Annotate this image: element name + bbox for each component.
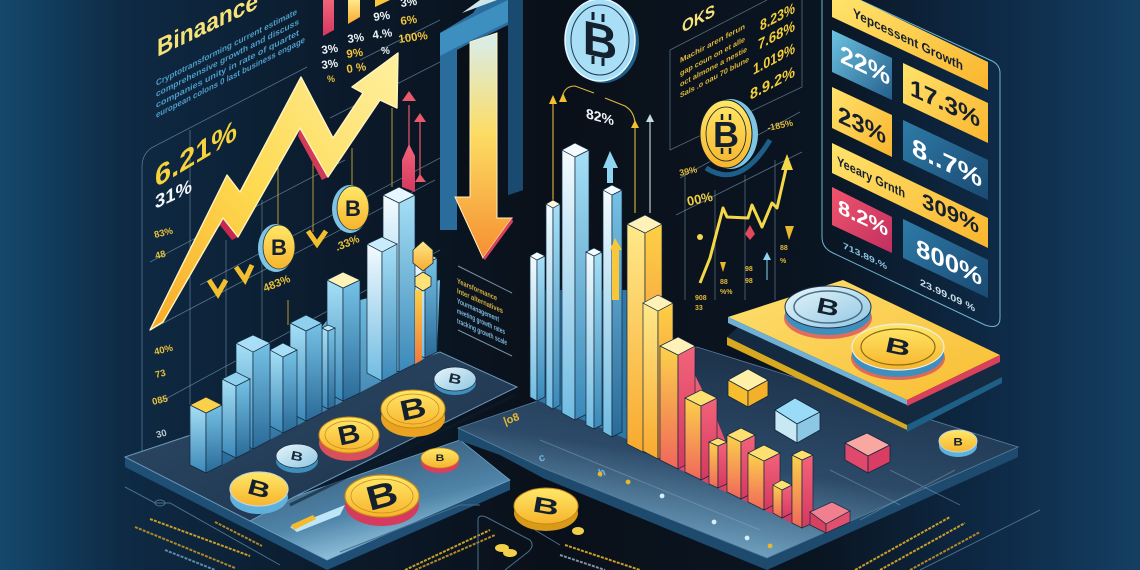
text block: centre note: tracking growth scale [457, 316, 507, 347]
bar chart: left blue bars [190, 187, 440, 473]
labels: OKS chart: 33 [695, 305, 703, 312]
text block: OKS copy: Machir aren ferun [680, 22, 745, 65]
tile: 800% [903, 219, 988, 298]
coin: blue rim: B [245, 474, 273, 504]
labels: OKS chart: %% [720, 289, 733, 296]
top mini bars and labels: % [327, 74, 335, 84]
bar mass behind: red [660, 360, 802, 528]
labels: chart percentages: 483% [262, 273, 292, 295]
coin: large gold: B [397, 391, 429, 427]
coin: small floor coin [939, 430, 977, 457]
bar 5 [322, 325, 335, 409]
header: Yepcessent Growth [832, 0, 988, 90]
coin: silver mid [276, 444, 318, 473]
panel: left platform [125, 352, 517, 570]
top mini bars and labels: 3% [321, 58, 339, 72]
coin: small floor coin: B [953, 435, 963, 448]
top mini bars and labels: % [381, 46, 390, 57]
band: Yeary Growth: 309% [922, 188, 979, 238]
coin: silver on card [784, 286, 872, 339]
coin: large red rim [345, 474, 419, 526]
axis labels: left chart: 83% [153, 226, 175, 241]
coin: OKS gold coin [700, 99, 770, 175]
labels: OKS chart: 908 [695, 295, 707, 302]
zigzag growth arrow [150, 53, 398, 330]
coin: large red rim: B [362, 474, 402, 519]
bar 2 [546, 200, 560, 409]
stats: OKS percentages [750, 0, 795, 104]
arrows: centre callouts [549, 86, 654, 213]
cube: yellow block [728, 369, 768, 407]
axis labels: left chart: 30 [155, 428, 168, 441]
bar mass behind: blue [530, 290, 640, 445]
top mini bars and labels [321, 0, 429, 84]
arrows: red up arrows [402, 91, 426, 192]
bar 10 [190, 397, 222, 473]
coin: floor bottom coin [514, 488, 578, 531]
bar 10 [709, 438, 727, 488]
labels: OKS chart: 98 [745, 278, 753, 285]
coin: silver mid: B [289, 449, 304, 465]
text block: intro copy: Cryptotransforming current estimate [156, 7, 297, 88]
panel: yellow raised card with coins [727, 280, 1002, 432]
glyphs on platform [502, 411, 775, 553]
bar 5 [603, 185, 622, 437]
bar 1 [413, 252, 437, 358]
bar 13 [773, 480, 792, 518]
text block: intro copy: comprehensive growth and discuss [156, 17, 299, 99]
glyphs on platform: ● [623, 475, 633, 489]
labels: OKS chart: % [780, 258, 787, 265]
text block: centre note: Yourmanagement [457, 296, 499, 324]
band: Yeary Growth [832, 143, 988, 248]
icon: yellow hexagon markers [413, 241, 433, 291]
glyphs on platform: ● [742, 531, 752, 545]
labels: OKS chart: 88 [780, 245, 788, 252]
bar 7 [643, 295, 673, 459]
glyphs on platform: ● [765, 539, 775, 553]
top mini bars and labels: 0 % [346, 61, 367, 76]
bar 6 [627, 215, 662, 453]
panel: growth table [822, 0, 1000, 326]
axis labels: left chart [151, 226, 175, 471]
coin: OKS gold coin: B [713, 114, 739, 155]
coin: chart coin 1 [258, 224, 295, 272]
stats: OKS percentages: 1.019% [753, 40, 795, 79]
top mini bars and labels: 3% [347, 32, 365, 46]
coin: gold red rim: B [335, 418, 363, 452]
text block: centre note: Yearsformance [457, 276, 497, 303]
labels: OKS chart: 88 [720, 279, 728, 286]
band: Yeary Growth: Yeeary Grnth [837, 154, 905, 201]
bar 6 [290, 315, 322, 421]
labels: OKS chart: 39% [678, 164, 698, 178]
text block: OKS copy [680, 22, 749, 100]
bar 9 [222, 372, 250, 458]
labels: chart percentages [262, 233, 362, 295]
glyphs on platform: c [537, 451, 547, 465]
bar 14 [792, 450, 813, 528]
bar 1 [530, 252, 545, 401]
tile: 800%: 800% [916, 234, 982, 291]
coin: chart coin 2: B [345, 196, 361, 221]
caption: left tile: 713.89.% [843, 240, 887, 271]
axis labels: left chart: 48 [154, 249, 167, 262]
tile: 22%: 22% [840, 39, 890, 91]
tile: 8.7%: 8..7% [912, 132, 982, 193]
bar mass behind [222, 280, 440, 465]
bar 11 [727, 428, 755, 499]
glyphs on platform: ● [595, 467, 605, 481]
coin: top large blue coin [565, 0, 639, 83]
labels: chart percentages: .33% [334, 233, 362, 254]
top mini bars and labels: 4.% [372, 27, 393, 42]
labels: OKS chart: -185% [766, 118, 794, 133]
bar 8 [236, 335, 270, 449]
bar 8 [660, 337, 695, 469]
axis labels: left chart: 73 [154, 368, 167, 381]
coin: small red [421, 448, 459, 473]
coin: small red: B [436, 453, 445, 464]
icon: small yellow pills [495, 527, 584, 557]
text block: OKS copy: gap coun on et alle [680, 35, 745, 78]
glyphs on platform: h [597, 466, 608, 480]
top mini bars and labels: 3% [321, 43, 339, 57]
glyphs on platform: ● [709, 515, 719, 529]
coin: chart coin 2 [332, 185, 369, 233]
coin: blue rim [230, 472, 288, 514]
coin: gold on card [851, 324, 945, 380]
coin: silver back: B [447, 371, 463, 388]
text block: centre note: Inter alternatives [457, 286, 503, 316]
axis labels: left chart: 40% [153, 343, 175, 358]
coin: gold on card: B [883, 333, 913, 362]
line chart: OKS trend [697, 154, 794, 283]
stats: OKS percentages: 8.9.2% [750, 63, 795, 104]
decorative fine print: bottom scribbles [135, 517, 980, 570]
icon: pencil marker on sheet [290, 505, 345, 532]
top mini bars and labels: 9% [346, 47, 364, 61]
tile: 23% [832, 87, 892, 157]
tile: 17.3%: 17.3% [910, 74, 980, 133]
arrows: on bars [603, 151, 622, 300]
text block: OKS copy: oct almone a nestie [680, 45, 747, 89]
icons: chevron markers [209, 231, 326, 294]
leader lines from arrow [278, 108, 392, 325]
bar 3 [367, 237, 397, 381]
cube: red block [845, 433, 890, 473]
coin: large gold [381, 390, 445, 437]
tile: 22% [832, 30, 892, 100]
coins on left platform [230, 367, 476, 526]
labels: OKS chart [678, 118, 794, 312]
tile: 17.3% [903, 63, 988, 143]
bar 12 [748, 445, 780, 510]
text block: OKS copy: Sals .o oau 70 blune [680, 55, 749, 100]
bar 4 [327, 272, 360, 401]
text block: intro copy: companies unity in rate of quartet [156, 28, 299, 110]
stat: 6.21%: 6.21% [155, 112, 237, 194]
orange accent bar [415, 290, 422, 364]
text block: centre note: meeting growth rates [457, 306, 505, 336]
bar 4 [586, 248, 602, 429]
bar chart: centre falling bars [530, 143, 813, 528]
coin: gold red rim [319, 417, 379, 461]
coin: silver back [434, 367, 476, 395]
glyphs on platform: ● [657, 489, 667, 503]
caption: right tile: 23.99.09 % [920, 277, 975, 315]
labels: OKS chart: 00% [686, 189, 715, 209]
tile: 8.2%: 8.2% [838, 196, 888, 241]
grid lines: left chart [142, 0, 802, 460]
coin: silver on card: B [814, 293, 842, 322]
label: 82%: 82% [586, 106, 614, 130]
big down arrow with frame [440, 0, 523, 260]
bar 7 [270, 343, 297, 433]
text block: intro copy: european colons 0 last business engage [156, 35, 305, 120]
coin: chart coin 1: B [271, 235, 287, 260]
bar 2 [383, 187, 415, 372]
top mini bars and labels: 100% [398, 30, 429, 46]
top mini bars and labels: 6% [400, 14, 418, 28]
axis labels: left chart: 79 [155, 458, 168, 471]
top mini bars and labels: 9% [373, 10, 391, 24]
decorative nodes and outlines [125, 487, 1040, 570]
cube: blue block [775, 398, 820, 443]
stats: OKS percentages: 7.68% [758, 17, 795, 54]
bar 3 [562, 143, 589, 420]
labels: OKS chart: 98 [745, 266, 753, 273]
tile: 8.7% [903, 120, 988, 200]
tile: 23%: 23% [838, 101, 886, 150]
glyphs on platform: |o8 [502, 411, 521, 428]
tile: 8.2% [832, 187, 892, 253]
cube: red end block [810, 502, 850, 533]
header: Yepcessent Growth: Yepcessent Growth [853, 6, 963, 73]
coin: top large blue coin: B [583, 11, 617, 72]
text block: centre note [457, 266, 512, 356]
stat: 31%: 31% [155, 176, 192, 214]
bar 9 [685, 390, 717, 480]
axis labels: left chart: 085 [151, 393, 170, 408]
panel: right platform [458, 347, 1018, 570]
coin: floor bottom coin: B [531, 492, 561, 521]
